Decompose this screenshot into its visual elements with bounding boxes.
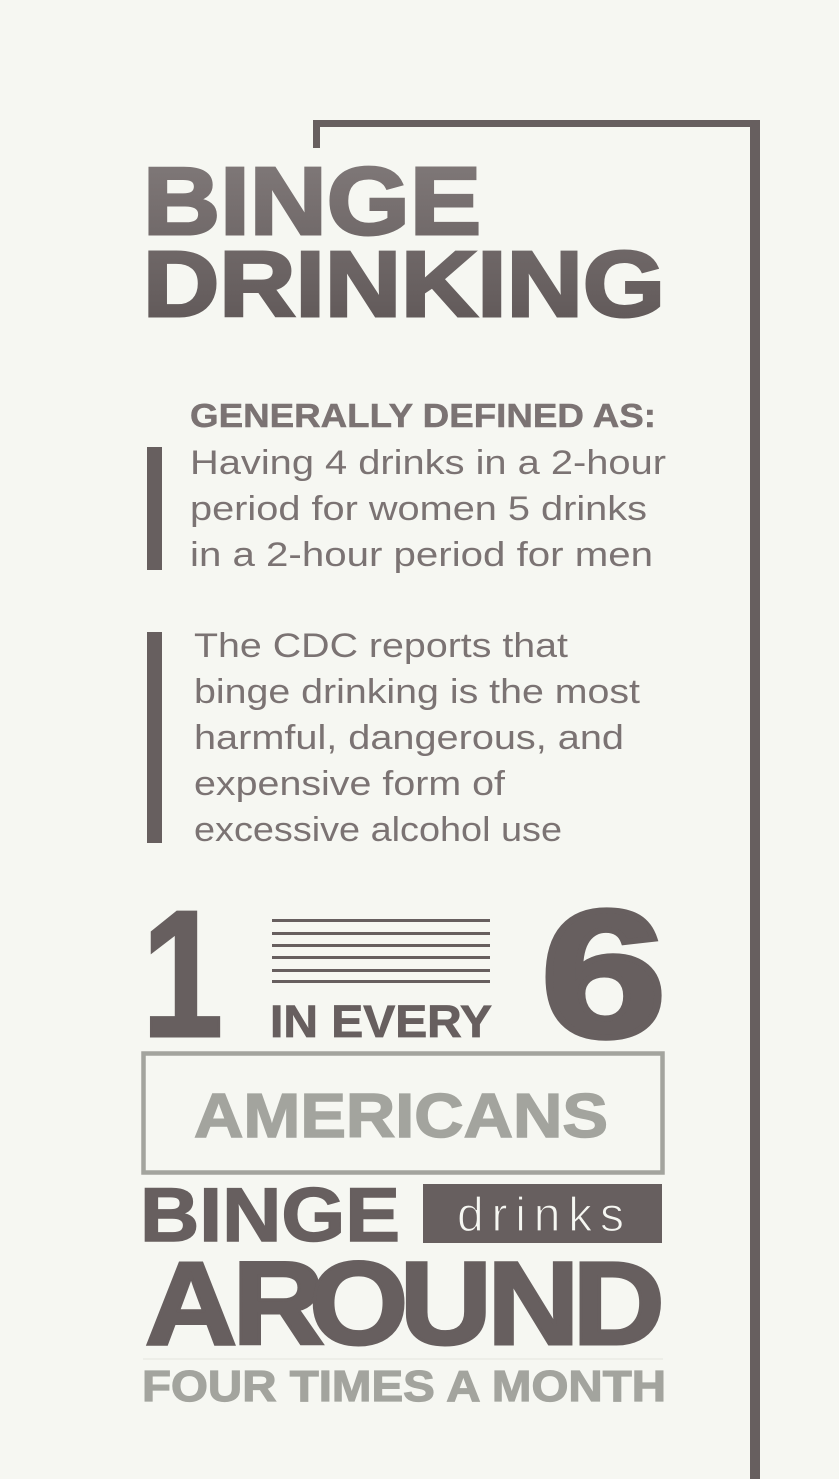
definition text <box>190 444 666 574</box>
definition heading: GENERALLY DEFINED AS: <box>190 397 656 434</box>
title: DRINKING <box>143 232 665 336</box>
CDC text: expensive form of <box>194 765 506 803</box>
CDC text: binge drinking is the most <box>194 673 641 711</box>
around word: AROUND <box>145 1238 665 1370</box>
CDC text <box>194 627 641 849</box>
panel: CDC statement <box>147 627 641 849</box>
drinks tag <box>423 1184 662 1243</box>
drinks tag: drinks <box>457 1189 624 1242</box>
CDC accent bar <box>147 632 162 843</box>
title <box>143 148 665 336</box>
numeral 1: 1 <box>142 874 223 1075</box>
CDC text: excessive alcohol use <box>194 811 562 849</box>
title: BINGE <box>143 148 481 255</box>
definition text: period for women 5 drinks <box>190 490 647 528</box>
definition text: in a 2-hour period for men <box>190 536 653 574</box>
six-line graphic <box>272 919 490 983</box>
definition text: Having 4 drinks in a 2-hour <box>190 444 666 482</box>
frame bracket <box>313 120 760 1479</box>
numeral 6: 6 <box>541 874 666 1075</box>
statistic: 1 in every 6 <box>142 874 666 1075</box>
CDC text: harmful, dangerous, and <box>194 719 624 757</box>
four times a month: FOUR TIMES A MONTH <box>142 1362 666 1411</box>
binge label: BINGE <box>140 1173 400 1258</box>
americans box: AMERICANS <box>194 1082 608 1151</box>
panel: definition <box>147 397 666 574</box>
definition accent bar <box>147 447 162 570</box>
in every label: IN EVERY <box>270 996 492 1047</box>
americans box <box>144 1054 662 1172</box>
CDC text: The CDC reports that <box>194 627 569 665</box>
